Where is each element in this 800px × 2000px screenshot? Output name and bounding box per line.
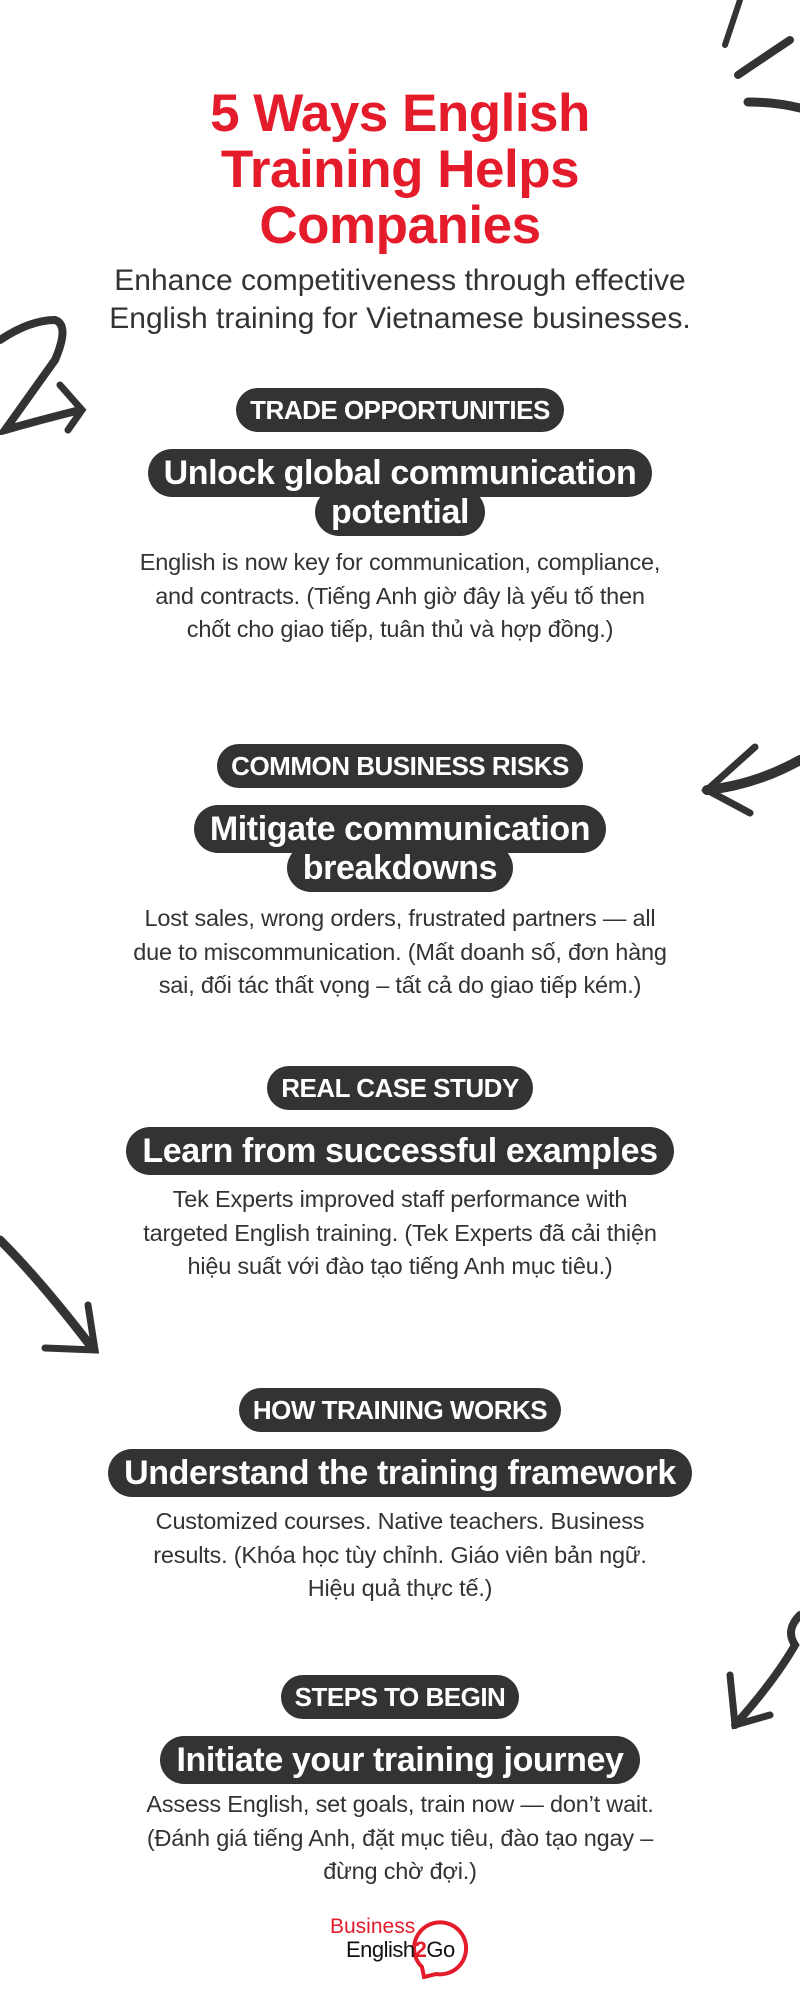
body 1: [140, 549, 660, 642]
tag 3: REAL CASE STUDY: [281, 1073, 519, 1103]
heading 2: [194, 805, 606, 892]
heading 1: [148, 449, 652, 536]
tag 4: [239, 1388, 561, 1432]
body 5: Assess English, set goals, train now — don’t wait.: [146, 1791, 654, 1817]
body 4: [153, 1508, 647, 1601]
section 2: [133, 744, 667, 998]
body 2: Lost sales, wrong orders, frustrated partners — all: [145, 905, 655, 931]
body 5: (Đánh giá tiếng Anh, đặt mục tiêu, đào tạo ngay –: [147, 1824, 653, 1850]
body 4: results. (Khóa học tùy chỉnh. Giáo viên bản ngữ.: [153, 1542, 647, 1568]
subtitle: [109, 264, 691, 335]
body 4: Customized courses. Native teachers. Business: [156, 1508, 644, 1534]
body 3: Tek Experts improved staff performance with: [173, 1186, 627, 1212]
logo: Business: [330, 1915, 415, 1938]
tag 4: HOW TRAINING WORKS: [253, 1395, 547, 1425]
body 2: [133, 905, 667, 998]
arrow: left top: [0, 316, 86, 435]
body 5: [146, 1791, 654, 1884]
title: Companies: [259, 196, 541, 255]
body 2: due to miscommunication. (Mất doanh số, đơn hàng: [133, 938, 667, 964]
heading 2: Mitigate communication: [210, 810, 590, 848]
logo: [330, 1915, 468, 1979]
title: [210, 84, 590, 255]
body 1: and contracts. (Tiếng Anh giờ đây là yếu tố then: [155, 582, 645, 608]
arrow: right pointing left: [701, 744, 800, 816]
tag 1: [236, 388, 564, 432]
subtitle: Enhance competitiveness through effective: [114, 264, 686, 297]
heading 2: breakdowns: [303, 849, 497, 887]
decoration: top-right strokes: [722, 0, 800, 112]
section 5: [146, 1675, 654, 1884]
section 1: [140, 388, 660, 642]
heading 1: potential: [331, 493, 469, 531]
tag 2: [217, 744, 583, 788]
heading 4: Understand the training framework: [124, 1454, 676, 1492]
logo: English2Go: [346, 1937, 455, 1962]
body 5: đừng chờ đợi.): [323, 1858, 477, 1884]
arrow: right bottom: [726, 1611, 800, 1730]
tag 1: TRADE OPPORTUNITIES: [250, 395, 550, 425]
section 4: [108, 1388, 692, 1601]
title: Training Helps: [221, 140, 579, 199]
tag 2: COMMON BUSINESS RISKS: [231, 751, 569, 781]
heading 3: Learn from successful examples: [142, 1132, 658, 1170]
body 3: hiệu suất với đào tạo tiếng Anh mục tiêu.): [187, 1253, 613, 1279]
tag 5: STEPS TO BEGIN: [295, 1682, 505, 1712]
tag 3: [267, 1066, 533, 1110]
arrow: left down-right: [0, 1236, 100, 1354]
heading 1: Unlock global communication: [164, 454, 636, 492]
body 1: English is now key for communication, compliance,: [140, 549, 660, 575]
body 3: targeted English training. (Tek Experts đã cải thiện: [143, 1220, 657, 1246]
body 2: sai, đối tác thất vọng – tất cả do giao tiếp kém.): [159, 972, 641, 998]
body 1: chốt cho giao tiếp, tuân thủ và hợp đồng.): [187, 616, 613, 642]
section 3: [126, 1066, 674, 1279]
title: 5 Ways English: [210, 84, 590, 143]
body 3: [143, 1186, 657, 1279]
subtitle: English training for Vietnamese businesses.: [109, 302, 691, 335]
tag 5: [281, 1675, 519, 1719]
heading 5: Initiate your training journey: [176, 1741, 624, 1779]
body 4: Hiệu quả thực tế.): [308, 1575, 492, 1601]
